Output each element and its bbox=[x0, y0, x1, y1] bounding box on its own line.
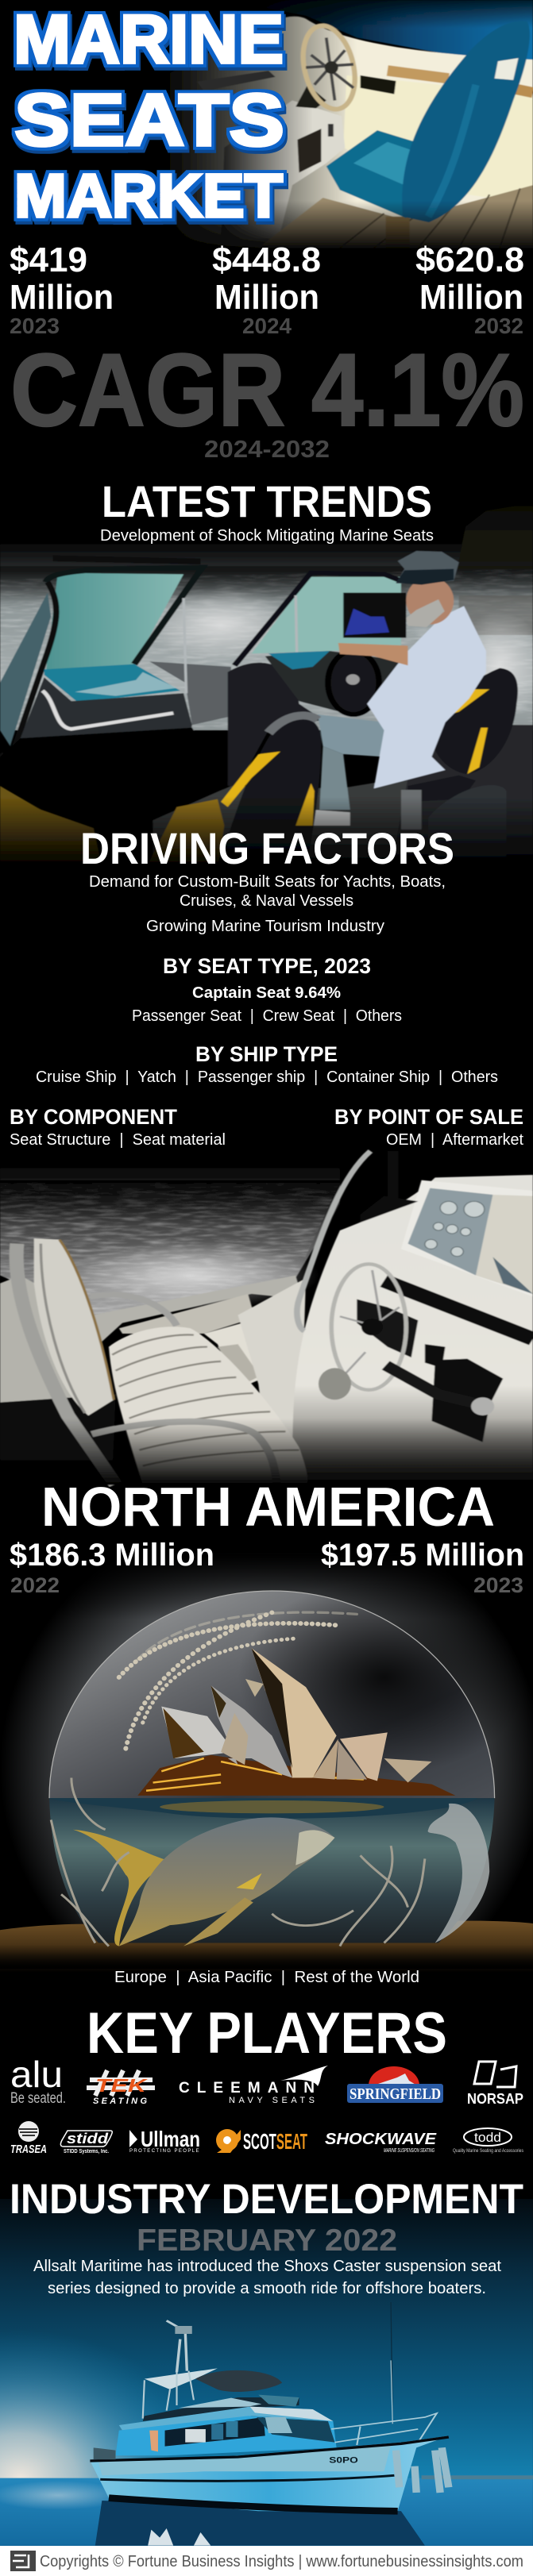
segment: by ship type: BY SHIP TYPE bbox=[195, 1042, 338, 1066]
development text bbox=[33, 2258, 501, 2297]
logo: Springfield: SPRINGFIELD bbox=[350, 2085, 441, 2103]
CAGR callout: 2024-2032 bbox=[204, 435, 330, 463]
market value 2023: 2023 bbox=[10, 314, 60, 338]
driving factors text: Cruises, & Naval Vessels bbox=[180, 892, 353, 910]
key players heading: KEY PLAYERS bbox=[87, 2001, 447, 2066]
logo: Ullman bbox=[129, 2127, 200, 2154]
segment: by component: BY COMPONENT bbox=[10, 1105, 177, 1129]
photo: white boat seat and helm bbox=[0, 1151, 533, 1485]
logo: alu: Be seated. bbox=[10, 2090, 66, 2107]
logo: Norsap: NORSAP bbox=[467, 2091, 523, 2107]
driving factors text: Growing Marine Tourism Industry bbox=[146, 918, 384, 935]
market value 2023 bbox=[10, 241, 114, 338]
footer bar bbox=[0, 2546, 533, 2576]
logo: Shockwave bbox=[325, 2131, 437, 2154]
logo: Todd bbox=[453, 2128, 524, 2154]
development date: FEBRUARY 2022 bbox=[137, 2224, 397, 2258]
logo: Shockwave: MARINE SUSPENSION SEATING bbox=[384, 2148, 435, 2154]
driving factors text: Demand for Custom-Built Seats for Yachts, Boats, bbox=[89, 873, 446, 891]
logo: TEK Seating: TEK bbox=[95, 2075, 148, 2096]
driving factors heading: DRIVING FACTORS bbox=[80, 823, 454, 873]
logo: Stidd: stidd bbox=[67, 2131, 109, 2147]
driving factors text bbox=[89, 873, 446, 935]
logo: Ullman: PROTECTING PEOPLE bbox=[129, 2149, 200, 2154]
logo: TEK Seating bbox=[87, 2070, 155, 2106]
logo: TEK Seating: SEATING bbox=[93, 2097, 149, 2106]
logo: alu: alu bbox=[10, 2054, 63, 2095]
segment: by point of sale bbox=[334, 1105, 523, 1149]
latest trends text: Development of Shock Mitigating Marine Seats bbox=[100, 527, 434, 545]
segment: by seat type: Passenger Seat | Crew Seat | Others bbox=[132, 1007, 402, 1025]
segment: by ship type bbox=[36, 1042, 498, 1086]
region value 2023: $197.5 Million bbox=[321, 1538, 524, 1573]
segment: by component bbox=[10, 1105, 226, 1149]
market value 2032: 2032 bbox=[474, 314, 523, 338]
logo: Shockwave: SHOCKWAVE bbox=[325, 2131, 437, 2148]
title: SEATS bbox=[14, 79, 284, 161]
market value 2024: $448.8 bbox=[212, 241, 321, 279]
region value 2022 bbox=[10, 1538, 214, 1597]
photo: motor yacht on blue water: S0PO bbox=[329, 2455, 358, 2465]
photo: motor yacht on blue water bbox=[0, 2199, 533, 2546]
segment: by seat type: Captain Seat 9.64% bbox=[192, 984, 341, 1002]
logo: Norsap bbox=[467, 2062, 523, 2107]
logo: Stidd: STIDD Systems, Inc. bbox=[64, 2149, 109, 2154]
latest trends photo: captain at boat helm bbox=[0, 492, 533, 869]
photo: opera house and fish in glass globe bbox=[0, 1554, 533, 1972]
segment: by point of sale: OEM | Aftermarket bbox=[386, 1131, 523, 1149]
segment: by seat type bbox=[132, 954, 402, 1025]
logo: Springfield bbox=[347, 2066, 443, 2103]
market value 2023: $419 bbox=[10, 241, 87, 279]
segment: by component: Seat Structure | Seat material bbox=[10, 1131, 226, 1149]
logo: Cleemann Navy Seats: NAVY SEATS bbox=[229, 2096, 315, 2105]
logo: Trasea: TRASEA bbox=[10, 2143, 47, 2156]
icon: Fortune Business Insights logo bbox=[10, 2551, 36, 2571]
title: MARINE bbox=[14, 2, 284, 78]
development text: series designed to provide a smooth ride for offshore boaters. bbox=[48, 2280, 486, 2297]
market value 2024 bbox=[212, 241, 321, 338]
market value 2032 bbox=[415, 241, 524, 338]
logo: Scotseat: SCOTSEAT bbox=[243, 2129, 307, 2154]
segment: by seat type: BY SEAT TYPE, 2023 bbox=[163, 954, 371, 978]
title bbox=[14, 2, 284, 230]
segment: by point of sale: BY POINT OF SALE bbox=[334, 1105, 523, 1129]
region heading: NORTH AMERICA bbox=[41, 1476, 495, 1538]
region value 2023 bbox=[321, 1538, 524, 1597]
hero photo: blue captain seat on boat bbox=[0, 0, 533, 251]
development text: Allsalt Maritime has introduced the Shoxs Caster suspension seat bbox=[33, 2258, 501, 2275]
region value 2023: 2023 bbox=[473, 1573, 523, 1597]
logo: Cleemann Navy Seats bbox=[179, 2066, 328, 2105]
market value 2024: 2024 bbox=[242, 314, 292, 338]
segment: by ship type: Cruise Ship | Yatch | Passenger ship | Container Ship | Others bbox=[36, 1069, 498, 1086]
title: MARKET bbox=[14, 162, 283, 230]
logo: Trasea bbox=[10, 2121, 47, 2156]
logo: Stidd bbox=[60, 2131, 112, 2154]
logo: Scotseat bbox=[216, 2129, 307, 2154]
logo: alu bbox=[10, 2054, 66, 2107]
logo: Ullman: Ullman bbox=[141, 2127, 200, 2151]
logo: Cleemann Navy Seats: CLEEMANN bbox=[179, 2080, 315, 2097]
region value 2022: 2022 bbox=[10, 1573, 60, 1597]
latest trends heading: LATEST TRENDS bbox=[102, 476, 432, 526]
market value 2032: $620.8 bbox=[415, 241, 524, 279]
logo: Todd: todd bbox=[474, 2130, 501, 2145]
market value 2032: Million bbox=[419, 278, 523, 317]
market value 2023: Million bbox=[10, 278, 114, 317]
other regions: Europe | Asia Pacific | Rest of the World bbox=[114, 1969, 419, 1986]
region value 2022: $186.3 Million bbox=[10, 1538, 214, 1573]
market value 2024: Million bbox=[214, 278, 319, 317]
